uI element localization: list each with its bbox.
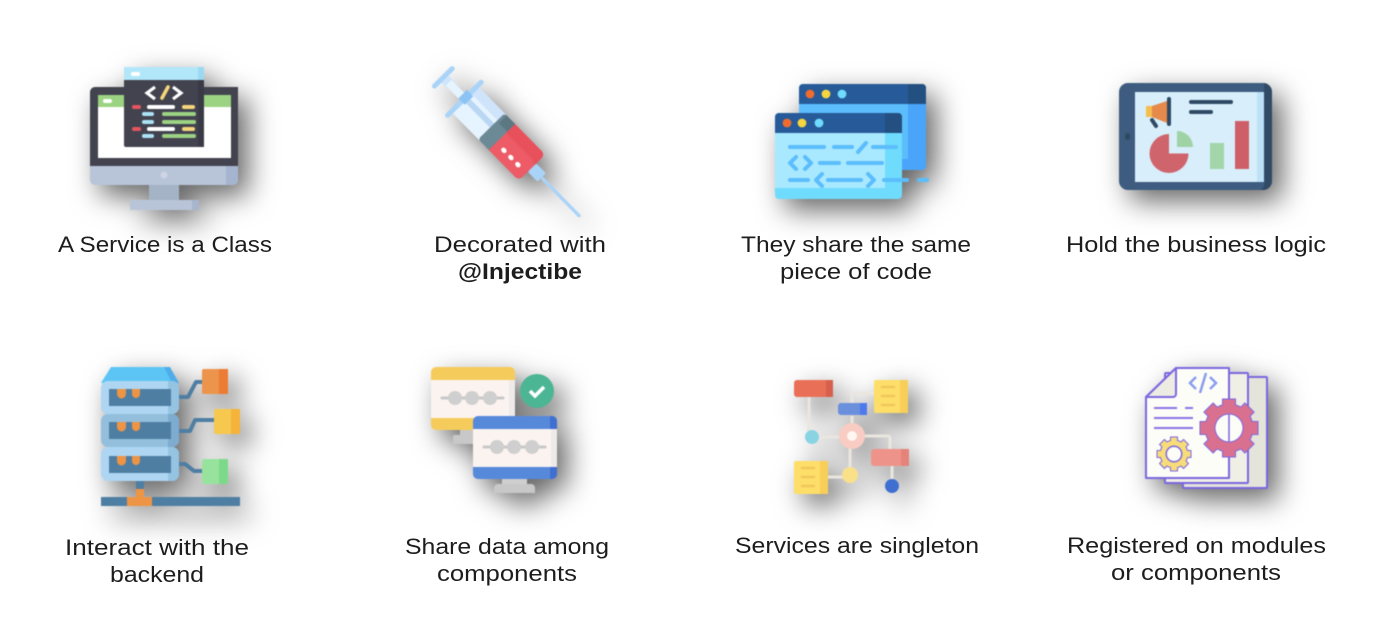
label: A Service is a Class: A Service is a Class — [58, 232, 272, 257]
label: Decorated with @Injectibe — [434, 232, 606, 284]
label: Decorated with @Injectibe: @Injectibe — [458, 259, 582, 284]
label: Interact with the backend — [65, 535, 249, 587]
label: They share the same piece of code: They share the same — [741, 232, 971, 257]
label: Registered on modules or components: or components — [1111, 560, 1281, 585]
label: Hold the business logic: Hold the business logic — [1066, 232, 1326, 257]
label: They share the same piece of code — [741, 232, 971, 284]
icon: two code windows — [775, 84, 927, 199]
label: Share data among components: Share data among — [405, 534, 609, 559]
icon: server with connected nodes — [101, 367, 240, 506]
icon: flow diagram — [794, 380, 909, 494]
label: Decorated with @Injectibe: Decorated with — [434, 232, 606, 257]
icon: documents with gears — [1146, 368, 1267, 488]
icon: syringe — [423, 57, 599, 235]
label: They share the same piece of code: piece of code — [780, 259, 932, 284]
label: Share data among components: components — [437, 561, 577, 586]
label: Services are singleton: Services are singleton — [735, 533, 979, 558]
icon: tablet with charts — [1119, 83, 1272, 190]
label: Interact with the backend: backend — [110, 562, 204, 587]
label: Share data among components — [405, 534, 609, 586]
label: Interact with the backend: Interact with the — [65, 535, 249, 560]
label: Registered on modules or components: Registered on modules — [1067, 533, 1326, 558]
icon: monitor with code window — [90, 67, 238, 210]
icon: two monitors with check mark — [431, 367, 557, 493]
label: Registered on modules or components — [1067, 533, 1326, 585]
